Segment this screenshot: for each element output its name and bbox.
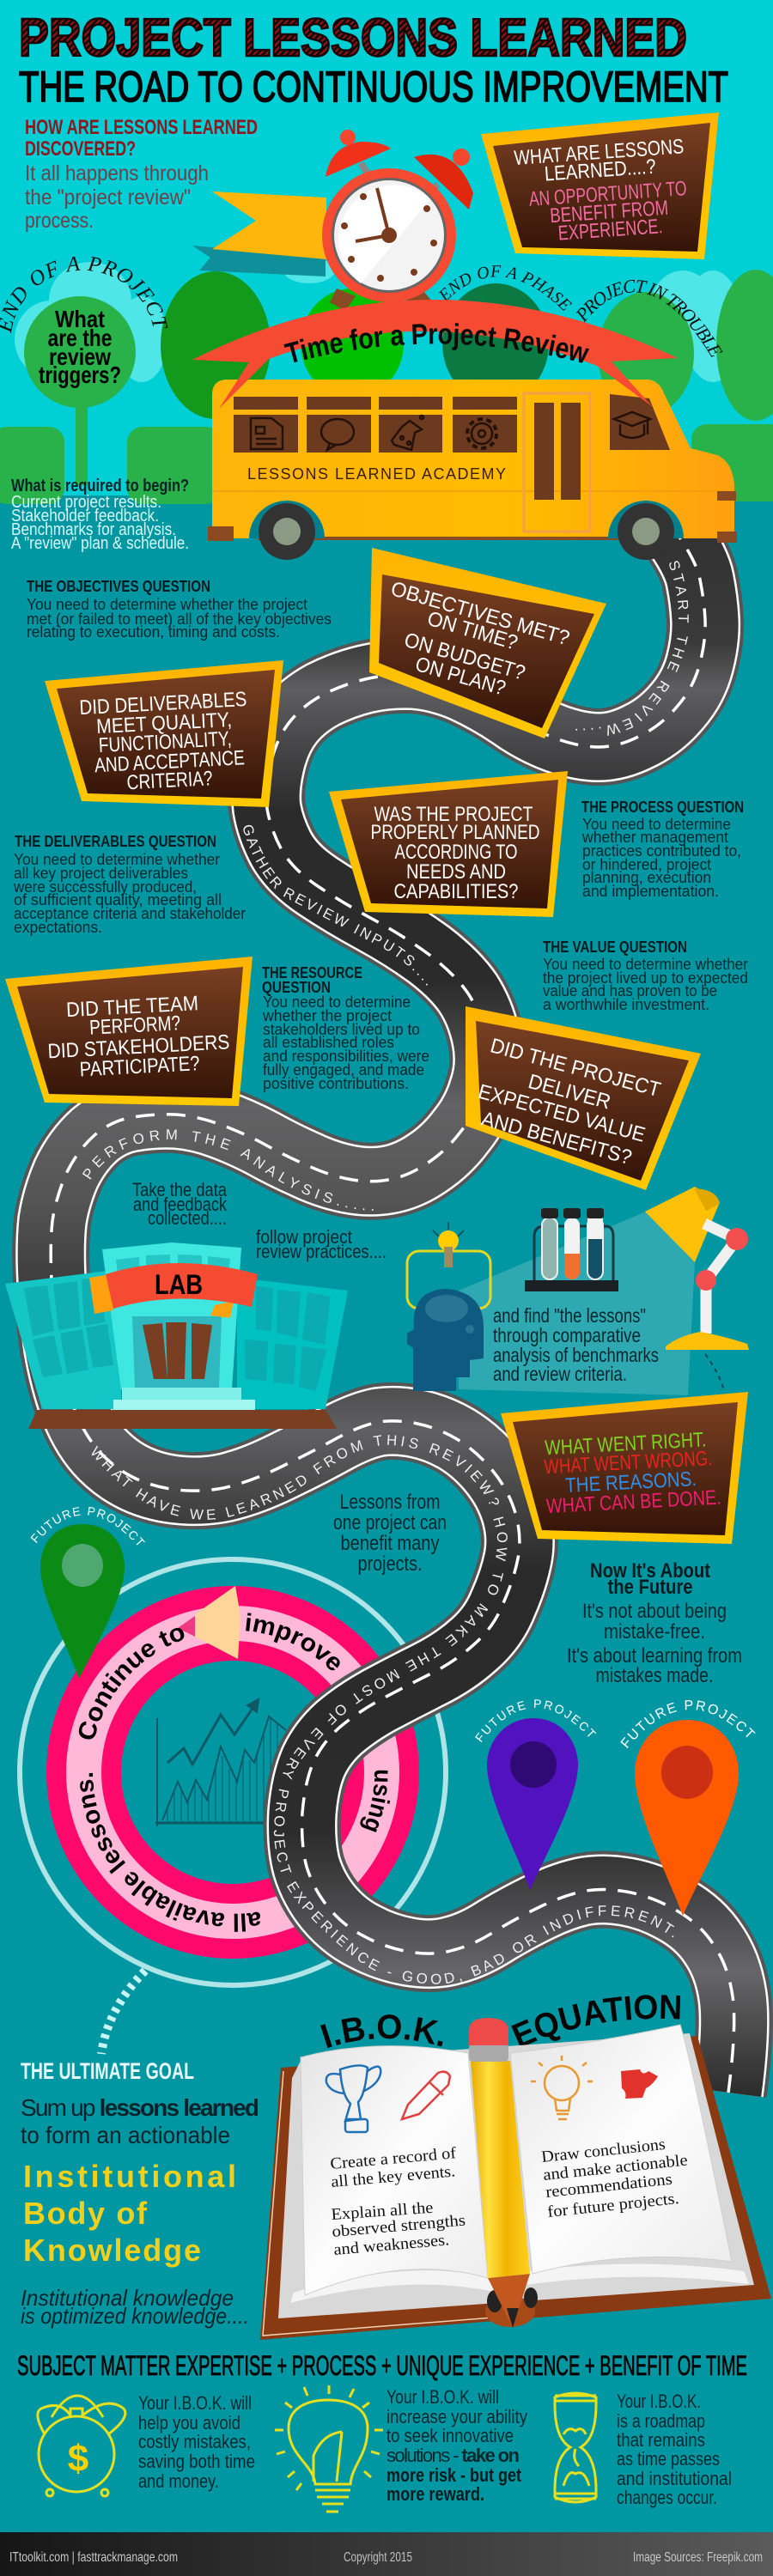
pin: future project purple — [475, 1699, 596, 1890]
text: now it's about the future — [567, 1559, 742, 1687]
page stack — [278, 2033, 754, 2318]
ring background — [20, 1559, 446, 1985]
benefit 2 text: solutions - take on — [386, 2445, 520, 2466]
chart icon — [155, 1699, 296, 1826]
intro text: how are lessons learned discovered: the "project review" — [25, 185, 191, 210]
sign: expected value — [466, 1006, 701, 1190]
hedges — [0, 424, 773, 504]
intro text: how are lessons learned discovered: It all happens through — [25, 161, 209, 185]
lab sign: LAB — [155, 1269, 203, 1300]
left page text: all the key events. — [331, 2162, 456, 2191]
sign: properly planned: CAPABILITIES? — [393, 880, 519, 903]
sign: properly planned: PROPERLY PLANNED — [371, 821, 539, 844]
text: value question: THE VALUE QUESTION — [543, 939, 687, 956]
text: follow review practices — [256, 1226, 386, 1262]
text: lessons from one project: benefit many — [340, 1532, 440, 1555]
benefit 1 text: Your I.B.O.K. will — [138, 2392, 252, 2414]
sign: deliverables: FUNCTIONALITY, — [98, 727, 232, 757]
text: process question: practices contributed to, — [582, 842, 741, 860]
text: resource question: fully engaged, and made — [263, 1061, 424, 1078]
sign: properly planned: WAS THE PROJECT — [374, 803, 533, 826]
intro text: how are lessons learned discovered: process. — [25, 209, 94, 233]
background: sky — [0, 0, 773, 496]
text: ultimate goal — [21, 2058, 259, 2329]
banner text: Time for a Project Review — [283, 323, 589, 363]
red banner — [192, 300, 678, 409]
left page — [301, 2046, 488, 2295]
text: value question: a worthwhile investment. — [543, 996, 709, 1013]
sign: objectives met: ON BUDGET? — [402, 629, 527, 685]
requirements text — [11, 477, 189, 553]
text: objectives question: THE OBJECTIVES QUESTION — [27, 578, 210, 595]
lab base — [28, 1410, 337, 1429]
text: lessons from one project: one project can — [333, 1511, 447, 1534]
left page text: observed strengths — [332, 2211, 466, 2241]
text: objectives question — [27, 578, 332, 641]
road text: start the review: START THE REVIEW.... — [575, 561, 689, 736]
text: ultimate goal: Institutional knowledge — [21, 2285, 234, 2311]
text: deliverables question: were successfully produced, — [13, 878, 197, 896]
text: resource question: THE RESOURCE — [262, 964, 362, 981]
text: take the data: and feedback — [133, 1194, 228, 1215]
sign: what are lessons learned: LEARNED....? — [544, 155, 657, 186]
text: now it's about the future: Now It's About — [590, 1559, 710, 1583]
text: resource question: You need to determine — [263, 993, 411, 1011]
requirements text: What is required to begin? — [11, 477, 189, 495]
text: process question: planning, execution — [582, 869, 711, 886]
tree question text — [39, 306, 121, 388]
ring text: improve — [246, 1613, 340, 1671]
sign: deliverables — [45, 660, 283, 807]
text: lessons from one project — [333, 1491, 447, 1576]
bus door — [524, 393, 590, 532]
sign: expected value: DELIVER — [526, 1070, 613, 1114]
text: ultimate goal: THE ULTIMATE GOAL — [21, 2058, 194, 2084]
text: deliverables question: THE DELIVERABLES QUESTION — [15, 833, 216, 850]
lab left wing — [5, 1269, 121, 1409]
text: deliverables question: of sufficient quality, meeting all — [14, 891, 222, 908]
icon: trophy — [326, 2065, 380, 2132]
right page text: for future projects. — [546, 2190, 680, 2221]
sign: properly planned — [329, 771, 568, 917]
lab building — [5, 1242, 348, 1429]
right page text: recommendations — [545, 2171, 673, 2202]
sign: properly planned: NEEDS AND — [406, 860, 506, 884]
benefit 3: hourglass — [555, 2391, 732, 2508]
benefit 2 text: more risk - but get — [386, 2464, 522, 2486]
text: find the lessons: and review criteria. — [493, 1363, 627, 1385]
text: resource question: QUESTION — [262, 979, 331, 996]
sign: team performance — [5, 957, 253, 1106]
left page text: Create a record of — [330, 2144, 458, 2173]
requirements text: A "review" plan & schedule. — [11, 534, 189, 553]
benefit 3 text: that remains — [617, 2429, 705, 2451]
text: process question: or hindered, project — [582, 856, 711, 873]
icon: desk lamp — [645, 1187, 749, 1391]
bus name: LESSONS LEARNED ACADEMY — [247, 465, 506, 483]
text: resource question: positive contributions. — [263, 1075, 409, 1092]
pin: future project green: FUTURE PROJECT — [31, 1506, 145, 1546]
lab sign — [89, 1263, 258, 1318]
benefit 3 text: as time passes — [617, 2448, 720, 2470]
icon: dotted path to goal — [101, 1971, 145, 2054]
benefit 3 text — [617, 2391, 732, 2508]
text: now it's about the future: mistake-free. — [604, 1620, 705, 1643]
footer: Copyright 2015 — [344, 2550, 412, 2565]
benefit 3 text: Your I.B.O.K. — [617, 2391, 701, 2412]
text: now it's about the future: It's not about being — [582, 1600, 727, 1623]
sign: objectives met: ON PLAN? — [412, 653, 508, 701]
left page text — [330, 2144, 466, 2259]
icon: test tubes — [525, 1208, 618, 1291]
sign: what went right: WHAT WENT RIGHT. — [545, 1428, 707, 1460]
icon: pencil sketch — [402, 2072, 450, 2119]
icon: puzzle piece — [621, 2069, 658, 2099]
sign: deliverables: DID DELIVERABLES — [79, 688, 247, 720]
tree question text: What — [55, 306, 105, 332]
benefit 1 text: costly mistakes, — [138, 2431, 251, 2452]
lab right wing — [237, 1278, 348, 1409]
bus icons: document, speech bubble, flask, gear, mortarboard — [251, 412, 650, 450]
icon: hourglass — [555, 2393, 596, 2502]
open book — [260, 2018, 771, 2340]
benefit 1: clock with dollar — [38, 2392, 255, 2496]
continuous improvement ring — [46, 1586, 419, 1959]
tree question text: review — [49, 343, 111, 370]
road text: gather review inputs: GATHER REVIEW INPUTS.... — [243, 824, 428, 986]
benefit 2 text — [386, 2386, 527, 2505]
lab center block — [102, 1242, 241, 1389]
ring arrow — [178, 1586, 240, 1659]
pin: future project orange: FUTURE PROJECT — [620, 1700, 756, 1748]
text: follow review practices: follow project — [256, 1226, 352, 1248]
text: now it's about the future: It's about learning from — [567, 1644, 742, 1668]
intro text: how are lessons learned discovered — [25, 116, 258, 233]
benefit 3 text: changes occur. — [617, 2487, 717, 2508]
trees — [24, 270, 773, 485]
icon: bulb sketch — [531, 2056, 593, 2119]
sign: deliverables: AND ACCEPTANCE — [94, 746, 246, 777]
lamp light beam — [459, 1212, 695, 1395]
lab door — [132, 1316, 222, 1388]
text: follow review practices: review practices.... — [256, 1241, 386, 1262]
sign: what are lessons learned: EXPERIENCE. — [557, 215, 663, 246]
sign: team performance: DID THE TEAM — [65, 992, 199, 1022]
text: find the lessons: through comparative — [493, 1324, 641, 1346]
text: process question: THE PROCESS QUESTION — [581, 799, 744, 816]
text: ultimate goal: Knowledge — [23, 2233, 201, 2268]
text: process question: whether management — [581, 829, 728, 846]
text: deliverables question: expectations. — [14, 919, 102, 936]
intro text: how are lessons learned discovered: HOW ARE LESSONS LEARNED — [25, 116, 258, 139]
tree question text: are the — [48, 325, 112, 351]
sign: deliverables: MEET QUALITY, — [95, 708, 233, 738]
footer: ITtoolkit.com | fasttrackmanage.com — [9, 2550, 178, 2565]
ring text: using — [360, 1771, 390, 1832]
text: objectives question: relating to execution, timing and costs. — [27, 623, 280, 641]
footer — [0, 2532, 773, 2576]
text: find the lessons: analysis of benchmarks — [493, 1344, 659, 1366]
text: value question: the project lived up to expected — [543, 969, 748, 987]
road: winding path — [51, 524, 734, 2093]
trigger label: end of a phase: END OF A PHASE — [439, 265, 572, 311]
text: take the data: collected.... — [148, 1207, 227, 1229]
benefit 2 text: increase your ability — [386, 2406, 527, 2427]
text: ultimate goal: Institutional — [23, 2159, 236, 2194]
book cover — [260, 2036, 771, 2340]
pin: future project purple: FUTURE PROJECT — [475, 1699, 596, 1742]
text: now it's about the future: the Future — [608, 1576, 692, 1599]
road text: perform the analysis: PERFORM THE ANALYSIS..... — [82, 1129, 374, 1211]
bus wheels — [249, 501, 684, 560]
pencil — [469, 2018, 538, 2328]
text: find the lessons — [493, 1304, 659, 1385]
sign: expected value: EXPECTED VALUE — [476, 1080, 648, 1147]
sign: what went right — [501, 1392, 748, 1544]
sign: what are lessons learned: BENEFIT FROM — [549, 197, 669, 228]
text: process question: You need to determine — [582, 816, 731, 833]
sign: what went right: WHAT CAN BE DONE. — [545, 1486, 721, 1518]
text: process question — [581, 799, 744, 900]
text: take the data: Take the data — [132, 1179, 228, 1200]
text: objectives question: You need to determine whether the project — [27, 596, 307, 613]
text: lessons from one project: Lessons from — [340, 1491, 440, 1514]
sign: team performance: PARTICIPATE? — [79, 1052, 200, 1081]
sign: what went right: THE REASONS. — [565, 1467, 697, 1498]
sign: objectives met: OBJECTIVES MET? — [388, 577, 572, 650]
sign: what went right: WHAT WENT WRONG. — [544, 1447, 713, 1479]
icon: thinking head with lightbulb — [407, 1222, 490, 1391]
benefit 2: lightbulb — [275, 2385, 527, 2512]
text: resource question: and responsibilities, were — [263, 1048, 429, 1065]
text: value question — [543, 939, 748, 1013]
icon: lightbulb — [275, 2385, 383, 2512]
benefit 2 text: more reward. — [386, 2483, 484, 2505]
pin: future project orange — [620, 1700, 756, 1916]
text: find the lessons: and find "the lessons" — [493, 1304, 646, 1327]
lab steps — [122, 1388, 241, 1400]
text: resource question: all established roles — [263, 1034, 394, 1051]
sign: expected value: AND BENEFITS? — [479, 1107, 634, 1170]
flag behind clock — [192, 191, 326, 276]
text: lessons from one project: projects. — [357, 1552, 423, 1576]
text: ultimate goal: is optimized knowledge.... — [21, 2303, 249, 2329]
text: ultimate goal: Sum up lessons learned — [21, 2094, 259, 2121]
requirements text: Stakeholder feedback. — [11, 507, 159, 526]
text: resource question: whether the project — [262, 1007, 392, 1024]
right page text — [540, 2136, 689, 2221]
ring text — [79, 1613, 390, 1932]
text: value question: You need to determine whether — [543, 956, 748, 973]
sign: what are lessons learned — [481, 112, 719, 259]
benefit 1 text: help you avoid — [138, 2412, 240, 2433]
ring text: all available lessons. — [80, 1772, 260, 1932]
benefit 1: clock with dollar: $ — [68, 2438, 88, 2480]
text: resource question: stakeholders lived up to — [263, 1021, 420, 1038]
text: deliverables question: You need to determine whether — [14, 851, 220, 868]
benefit 3 text: and institutional — [617, 2468, 732, 2489]
sign: what are lessons learned: AN OPPORTUNITY TO — [528, 177, 687, 211]
benefit 2 text: to seek innovative — [386, 2425, 514, 2446]
text: objectives question: met (or failed to meet) all of the key objectives — [27, 611, 332, 628]
text: process question: and implementation. — [582, 883, 719, 900]
trigger label: project in trouble: PROJECT IN TROUBLE — [575, 280, 723, 357]
left page text: and weaknesses. — [333, 2231, 450, 2259]
tree question text: triggers? — [39, 361, 121, 388]
sign: team performance: DID STAKEHOLDERS — [47, 1030, 230, 1063]
benefit 3 text: is a roadmap — [617, 2410, 705, 2432]
text: value question: value and has proven to be — [543, 982, 717, 999]
alarm clock — [322, 130, 473, 311]
left page text: Explain all the — [331, 2199, 434, 2224]
icon: dollar clock — [38, 2396, 125, 2496]
right page text: Draw conclusions — [540, 2136, 666, 2166]
bus bumpers — [208, 491, 737, 543]
school bus — [208, 380, 737, 560]
benefit 2 text: Your I.B.O.K. will — [386, 2386, 499, 2408]
sign: deliverables: CRITERIA? — [126, 767, 213, 794]
text: deliverables question: acceptance criteria and stakeholder — [14, 905, 246, 922]
bus windows — [234, 394, 670, 453]
sign: expected value: DID THE PROJECT — [488, 1034, 663, 1102]
sign: objectives met — [369, 548, 606, 738]
text: ultimate goal: Body of — [23, 2196, 148, 2231]
sign: objectives met: ON TIME? — [424, 607, 520, 655]
benefit 1 text: and money. — [138, 2470, 219, 2492]
benefit 1 text: saving both time — [138, 2451, 255, 2472]
sign: team performance: PERFORM? — [89, 1012, 181, 1040]
intro text: how are lessons learned discovered: DISCOVERED? — [25, 137, 136, 161]
text: now it's about the future: mistakes made. — [596, 1664, 713, 1687]
ring text: Continue to — [79, 1628, 184, 1740]
pin: future project green — [31, 1506, 145, 1679]
text: deliverables question — [13, 833, 246, 936]
text: resource question — [262, 964, 429, 1092]
right page — [510, 2025, 732, 2274]
equation heading: I.B.O.K.: I.B.O.K. — [320, 2014, 443, 2049]
right page text: and make actionable — [542, 2151, 689, 2184]
requirements text: Current project results. — [11, 493, 161, 512]
text: deliverables question: all key project deliverables — [14, 865, 188, 882]
benefit 1 text — [138, 2392, 255, 2492]
road text: long message: WHAT HAVE WE LEARNED FROM THIS REVIEW? HOW TO MAKE THE MOST OF EVERY PROJECT EXPERIENCE - GOOD, BAD OR INDIFFERENT. — [91, 1435, 674, 1984]
sign: what are lessons learned: WHAT ARE LESSONS — [514, 135, 685, 170]
text: take the data — [132, 1179, 228, 1229]
requirements text: Benchmarks for analysis. — [11, 520, 176, 539]
clouds — [15, 258, 743, 382]
equation heading: EQUATION: EQUATION — [511, 1995, 680, 2045]
text: ultimate goal: to form an actionable — [21, 2122, 230, 2148]
sign: properly planned: ACCORDING TO — [395, 841, 517, 864]
